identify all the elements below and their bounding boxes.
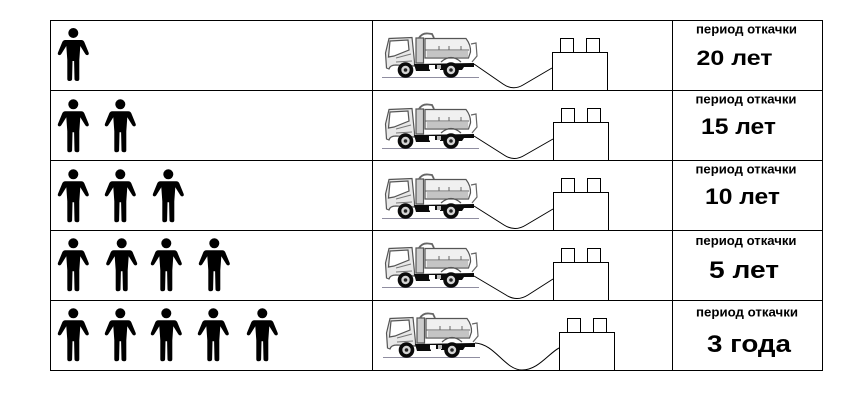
value: 5 years: 5 лет: [709, 257, 779, 284]
icons: three people: [58, 169, 184, 222]
label: pumping period: период откачки: [696, 22, 797, 36]
table frame: [50, 20, 823, 371]
value: 20 years: 20 лет: [696, 47, 772, 70]
value: 15 years: 15 лет: [701, 114, 776, 139]
label: pumping period: период откачки: [696, 306, 798, 320]
hose: [475, 343, 559, 370]
hose: [474, 276, 553, 298]
icons: four people: [58, 238, 230, 291]
icon: septic tank: [554, 248, 608, 300]
row 5: 3 years: [58, 306, 798, 370]
row 1: 20 years: [58, 22, 797, 90]
value: 10 years: 10 лет: [705, 184, 780, 209]
value: 3 years: 3 года: [707, 331, 792, 358]
icon: septic tank: [552, 38, 608, 90]
hose: [474, 206, 553, 228]
icon: vacuum truck: [382, 104, 479, 149]
hose: [474, 64, 552, 88]
icon: vacuum truck: [383, 313, 480, 358]
label: pumping period: период откачки: [696, 92, 796, 106]
icons: two people: [58, 99, 136, 152]
row 4: 5 years: [58, 234, 796, 300]
row 3: 10 years: [58, 162, 796, 230]
icon: septic tank: [554, 108, 608, 160]
icon: septic tank: [554, 178, 608, 230]
icons: five people: [58, 308, 278, 361]
icon: vacuum truck: [382, 33, 479, 78]
icon: vacuum truck: [382, 174, 479, 219]
label: pumping period: период откачки: [696, 234, 796, 248]
icon: one person: [58, 28, 89, 81]
icon: vacuum truck: [382, 243, 479, 288]
icon: septic tank: [560, 318, 614, 370]
hose: [474, 136, 553, 158]
row 2: 15 years: [58, 92, 796, 160]
label: pumping period: период откачки: [696, 162, 796, 176]
